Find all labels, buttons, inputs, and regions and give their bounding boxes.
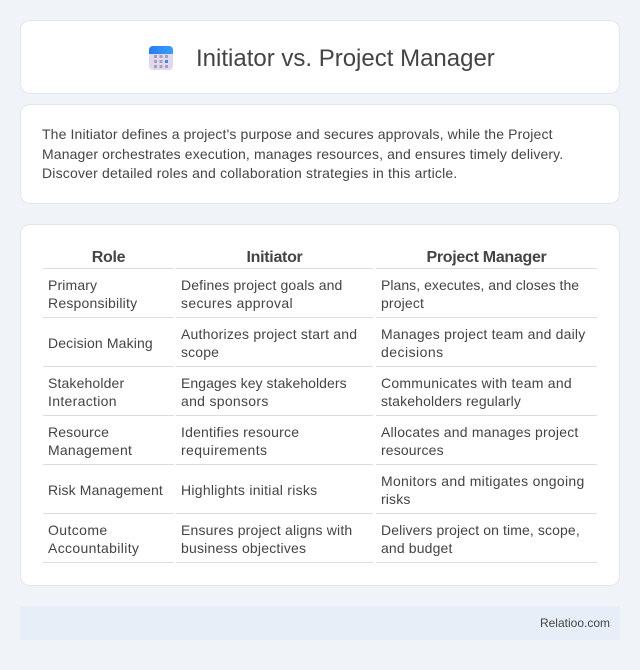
row: decision making: Manages project team and daily (381, 326, 585, 342)
row: resource management: Identifies resource (181, 424, 299, 440)
row: risk management: Monitors and mitigates ongoing (381, 473, 585, 489)
row: decision making: scope (181, 344, 219, 360)
row: primary responsibility: project (381, 295, 424, 311)
panel: intro text card (20, 104, 620, 204)
icon: calendar (149, 46, 173, 70)
row: stakeholder interaction: Communicates with team and (381, 375, 572, 391)
row: risk management: risks (381, 491, 410, 507)
row: decision making: decisions (381, 344, 444, 360)
footer credit: Relatioo.com (540, 616, 610, 630)
row: stakeholder interaction: and sponsors (181, 393, 269, 409)
row: risk management: Highlights initial risks (181, 482, 317, 498)
footer bar (20, 606, 620, 640)
row: risk management (48, 473, 585, 507)
intro text: Discover detailed roles and collaboration strategies in this article. (42, 165, 457, 181)
row: outcome accountability: Ensures project aligns with (181, 522, 352, 538)
row: resource management (48, 424, 579, 458)
intro text: The Initiator defines a project's purpose and secures approvals, while the Project (42, 126, 553, 142)
row: primary responsibility: Plans, executes, and closes the (381, 277, 579, 293)
row: outcome accountability (48, 522, 580, 556)
row: outcome accountability: and budget (381, 540, 452, 556)
row: stakeholder interaction: Stakeholder (48, 375, 124, 391)
row: outcome accountability: Delivers project on time, scope, (381, 522, 580, 538)
row: stakeholder interaction: Interaction (48, 393, 117, 409)
title: Initiator vs. Project Manager (196, 45, 495, 72)
row: primary responsibility (48, 277, 579, 311)
column headers: Role (92, 249, 125, 266)
row: resource management: Allocates and manages project (381, 424, 579, 440)
row: outcome accountability: Outcome (48, 522, 108, 538)
row: outcome accountability: Accountability (48, 540, 139, 556)
row: decision making: Authorizes project start and (181, 326, 357, 342)
row: primary responsibility: secures approval (181, 295, 293, 311)
column headers: Project Manager (426, 249, 546, 266)
row: primary responsibility: Primary (48, 277, 97, 293)
column headers: Initiator (247, 249, 302, 266)
row: decision making (48, 326, 586, 360)
intro text (42, 126, 563, 181)
row: decision making: Decision Making (48, 335, 153, 351)
row: primary responsibility: Responsibility (48, 295, 137, 311)
row: outcome accountability: business objectives (181, 540, 306, 556)
row: stakeholder interaction: stakeholders regularly (381, 393, 521, 409)
column headers (92, 249, 546, 266)
intro text: Manager orchestrates execution, manages resources, and ensures timely delivery. (42, 146, 563, 162)
row: risk management: Risk Management (48, 482, 163, 498)
panel: comparison table card (20, 224, 620, 586)
row: resource management: Management (48, 442, 132, 458)
row: stakeholder interaction (48, 375, 572, 409)
row: resource management: requirements (181, 442, 267, 458)
panel: title card (20, 20, 620, 94)
row: resource management: Resource (48, 424, 109, 440)
row: resource management: resources (381, 442, 444, 458)
row: stakeholder interaction: Engages key stakeholders (181, 375, 347, 391)
comparison table (43, 249, 597, 563)
row: primary responsibility: Defines project goals and (181, 277, 342, 293)
